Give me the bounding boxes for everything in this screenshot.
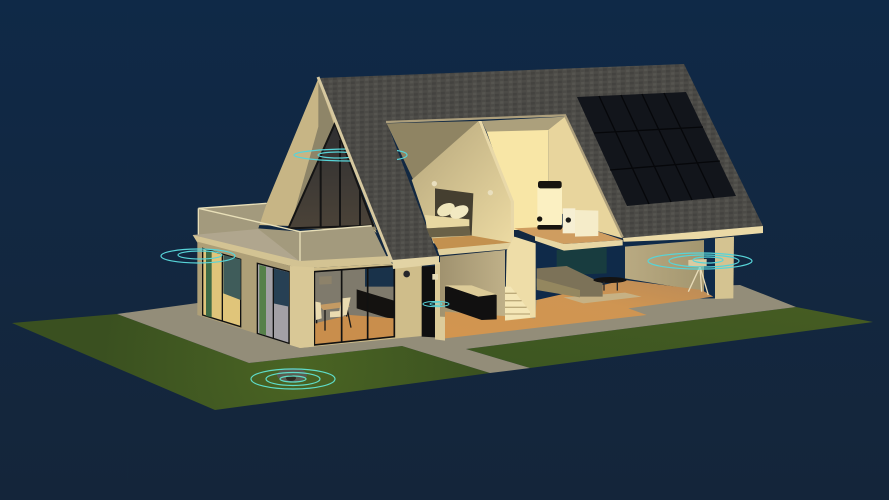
bedroom sloped ceiling <box>387 121 478 180</box>
house <box>193 78 445 348</box>
central column <box>505 237 536 321</box>
upper room back wall <box>487 130 548 230</box>
ring: left terrace <box>161 249 235 263</box>
ring: upper gable sensor <box>294 149 366 161</box>
upper platform floor <box>514 227 623 244</box>
floor lamp <box>688 259 708 295</box>
sensor rings <box>161 150 752 307</box>
front wall <box>299 264 422 348</box>
ground floor <box>445 280 713 338</box>
rug <box>563 293 642 303</box>
inverter <box>563 208 575 233</box>
upper room ceiling <box>482 117 565 132</box>
terrace slab <box>193 229 300 262</box>
ring segment: gable sensor right end <box>397 150 407 160</box>
terrace fascia <box>193 235 392 268</box>
left eave fascia <box>392 256 439 269</box>
gable wall <box>258 78 377 233</box>
roof trim <box>386 115 623 237</box>
sofa <box>537 266 603 297</box>
left lawn <box>12 314 490 410</box>
corner post <box>290 266 314 348</box>
ring: door <box>423 301 449 307</box>
left window 1 <box>203 248 241 327</box>
right column <box>715 237 734 299</box>
upper room side wall <box>548 117 623 238</box>
roof with cutout <box>320 64 763 260</box>
balustrade glass <box>198 203 387 262</box>
dining table <box>315 297 351 331</box>
bedroom floor <box>432 236 512 250</box>
partition edge <box>478 121 514 243</box>
water tank <box>537 181 562 230</box>
lower left room wall <box>440 250 505 320</box>
bed <box>425 188 473 237</box>
door <box>422 266 435 337</box>
concrete path <box>117 285 796 373</box>
right eave fascia <box>623 226 763 246</box>
gable shaded wall <box>290 80 377 230</box>
ring: mower <box>251 369 335 389</box>
gable and upper glazing (coords from 3x crop) <box>193 78 445 348</box>
living back opening <box>535 238 715 300</box>
battery <box>575 210 598 237</box>
ground <box>12 285 873 410</box>
living window <box>557 247 607 275</box>
stairs <box>505 287 530 320</box>
roof edge trim <box>318 77 392 262</box>
upper platform edge <box>535 236 623 251</box>
triangular window <box>288 123 373 228</box>
door post <box>435 260 445 341</box>
bedroom slab edge <box>437 242 514 255</box>
dining window <box>314 266 394 345</box>
kitchen island <box>445 285 497 320</box>
wall lights <box>432 181 493 195</box>
robot mower <box>277 368 307 382</box>
ring: right living room <box>648 253 752 269</box>
living right wall <box>625 240 704 292</box>
interior cutaway (coords from 3x crop) <box>386 115 734 338</box>
left wall <box>197 242 300 347</box>
left window 2 <box>257 263 289 343</box>
solar panels <box>577 92 736 206</box>
bedroom wall <box>412 121 512 243</box>
coffee table <box>593 277 627 291</box>
doorbell camera <box>403 271 410 277</box>
right lawn <box>466 307 873 368</box>
